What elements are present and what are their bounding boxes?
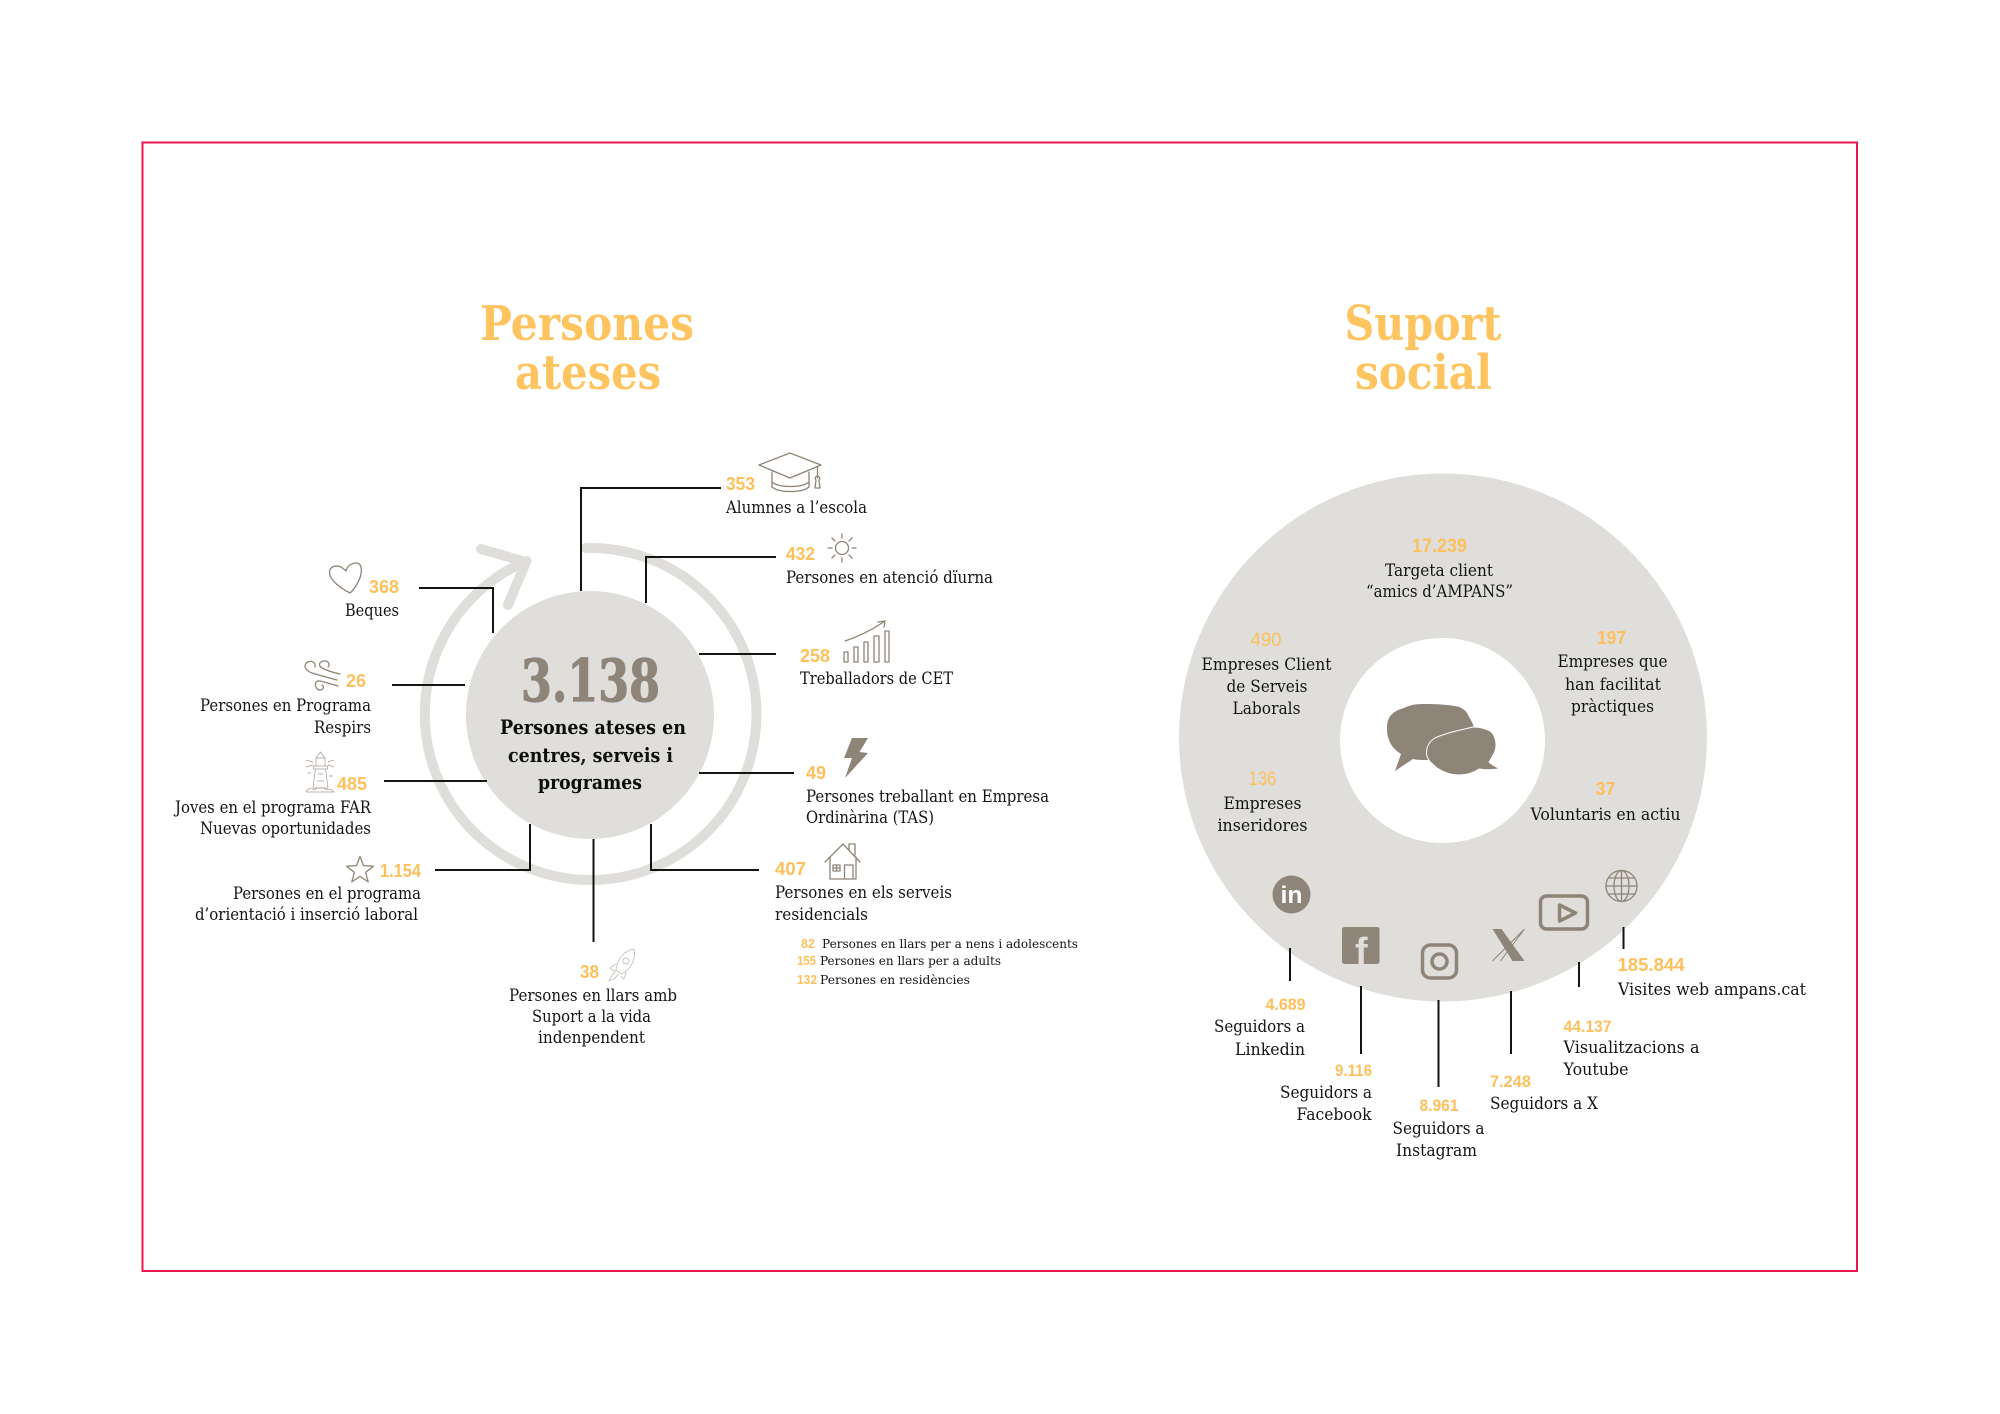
- item: 432 atencio diurna: Persones en atenció dïurna: [786, 568, 993, 587]
- heading: persones ateses: [480, 296, 694, 401]
- item: 485 programa far: [173, 752, 372, 838]
- item: 49 empresa ordinaria: Persones treballant en Empresa: [806, 787, 1049, 806]
- icon: youtube: [1540, 896, 1588, 929]
- circular arrow ring: [425, 548, 757, 880]
- item: 258 treballadors cet: 258: [800, 645, 830, 666]
- item: 1.154 orientacio i insercio: Persones en el programa: [233, 884, 421, 903]
- item: 353 alumnes: [725, 453, 867, 517]
- heading: suport social: Suport: [1344, 296, 1502, 352]
- icon: star: [347, 856, 373, 882]
- social: x: 7.248: [1490, 1072, 1531, 1091]
- icon: rising bar chart: [844, 621, 889, 662]
- breakdown list: 155: [797, 954, 816, 968]
- item: 368 beques: 368: [369, 576, 399, 597]
- item: 38 llars suport: Persones en llars amb: [509, 986, 677, 1005]
- stat: 136 empreses inseridores: 136: [1248, 769, 1276, 790]
- connector lines: [384, 488, 794, 942]
- panel: suport social: [1179, 296, 1806, 1160]
- item: 432 atencio diurna: [786, 534, 993, 587]
- total: 3.138: centres, serveis i: [508, 744, 673, 767]
- social: linkedin: 4.689: [1266, 995, 1306, 1014]
- central disc: [466, 591, 714, 839]
- stat: 37 voluntaris: 37: [1596, 778, 1616, 799]
- social: instagram: 8.961: [1420, 1096, 1458, 1115]
- social: facebook: Seguidors a: [1280, 1083, 1372, 1102]
- social: web: [1606, 870, 1806, 999]
- item: 38 llars suport: 38: [580, 961, 599, 982]
- stat: 136 empreses inseridores: Empreses: [1224, 794, 1302, 813]
- stat: 490 empreses client: [1202, 630, 1332, 718]
- social: youtube: 44.137: [1564, 1017, 1612, 1036]
- total: 3.138: [500, 647, 686, 794]
- icon: lighthouse: [306, 752, 334, 792]
- stat: 490 empreses client: Laborals: [1232, 699, 1300, 718]
- breakdown list: Persones en residències: [820, 972, 970, 987]
- stat: 17.239 targeta client: “amics d’AMPANS”: [1366, 582, 1513, 601]
- item: 38 llars suport: [509, 949, 677, 1047]
- item: 38 llars suport: Suport a la vida: [532, 1007, 651, 1026]
- item: 353 alumnes: 353: [726, 473, 755, 494]
- item: 368 beques: [329, 563, 399, 620]
- heading: persones ateses: Persones: [480, 296, 694, 352]
- item: 407 serveis residencials: Persones en els serveis: [775, 883, 952, 902]
- heading: suport social: [1344, 296, 1502, 401]
- stat: 490 empreses client: Empreses Client: [1202, 655, 1332, 674]
- item: 26 programa respirs: [200, 661, 371, 737]
- donut: [1179, 474, 1707, 1002]
- item: 432 atencio diurna: 432: [786, 543, 815, 564]
- item: 485 programa far: 485: [337, 773, 367, 794]
- item: 258 treballadors cet: Treballadors de CET: [800, 669, 953, 688]
- item: 368 beques: Beques: [345, 601, 399, 620]
- social: youtube: Youtube: [1563, 1060, 1628, 1079]
- breakdown list: 82: [801, 937, 815, 951]
- item: 26 programa respirs: Persones en Programa: [200, 696, 371, 715]
- heading: suport social: social: [1355, 345, 1492, 401]
- item: 407 serveis residencials: [775, 844, 1078, 987]
- icon: facebook: [1342, 927, 1380, 973]
- social: web: 185.844: [1618, 954, 1685, 975]
- breakdown list: 132: [797, 973, 817, 987]
- icon: linkedin: [1272, 876, 1310, 914]
- total: 3.138: 3.138: [521, 647, 660, 715]
- icon: wind: [305, 661, 340, 690]
- icon: instagram: [1422, 945, 1456, 978]
- stat: 197 practiques: [1558, 627, 1668, 716]
- social: instagram: [1392, 945, 1485, 1160]
- stat: 490 empreses client: 490: [1250, 630, 1282, 651]
- item: 485 programa far: Nuevas oportunidades: [200, 819, 371, 838]
- item: 49 empresa ordinaria: 49: [806, 762, 826, 783]
- icon: heart: [329, 563, 361, 593]
- icon: speech bubbles: [1387, 704, 1500, 775]
- icon: graduation cap: [759, 453, 821, 492]
- social: instagram: Seguidors a: [1392, 1119, 1485, 1138]
- stat: 197 practiques: han facilitat: [1565, 675, 1661, 694]
- breakdown list: Persones en llars per a adults: [820, 953, 1001, 968]
- social: instagram: Instagram: [1396, 1141, 1477, 1160]
- icon: house: [825, 844, 860, 879]
- total: 3.138: Persones ateses en: [500, 716, 686, 739]
- frame: [142, 142, 1857, 1271]
- social: facebook: Facebook: [1296, 1105, 1372, 1124]
- social: linkedin: Seguidors a: [1214, 1017, 1305, 1036]
- item: 26 programa respirs: Respirs: [314, 718, 371, 737]
- stat: 136 empreses inseridores: [1218, 769, 1308, 835]
- icon: rocket: [609, 949, 634, 981]
- stat: 197 practiques: 197: [1597, 627, 1626, 648]
- social: linkedin: [1214, 876, 1310, 1059]
- social: x: [1490, 929, 1598, 1113]
- breakdown list: Persones en llars per a nens i adolescents: [822, 936, 1078, 951]
- panel: persones ateses: [173, 296, 1078, 1047]
- item: 49 empresa ordinaria: Ordinàrina (TAS): [806, 808, 934, 827]
- social: youtube: Visualitzacions a: [1563, 1038, 1700, 1057]
- stat: 197 practiques: Empreses que: [1558, 652, 1668, 671]
- item: 485 programa far: Joves en el programa FAR: [173, 798, 372, 817]
- item: 407 serveis residencials: 407: [775, 858, 806, 879]
- social: x: Seguidors a X: [1490, 1094, 1598, 1113]
- stat: 136 empreses inseridores: inseridores: [1218, 816, 1308, 835]
- social: youtube: [1540, 896, 1700, 1079]
- stat: 17.239 targeta client: Targeta client: [1385, 561, 1493, 580]
- icon: sun: [828, 534, 856, 562]
- item: 1.154 orientacio i insercio: d’orientació i inserció laboral: [195, 905, 418, 924]
- item: 258 treballadors cet: [800, 621, 953, 688]
- stat: 37 voluntaris: [1530, 778, 1681, 824]
- stat: 197 practiques: pràctiques: [1571, 697, 1654, 716]
- icon: x: [1492, 929, 1524, 961]
- item: 26 programa respirs: 26: [346, 670, 366, 691]
- icon: globe: [1606, 870, 1637, 902]
- item: 1.154 orientacio i insercio: 1.154: [380, 860, 422, 881]
- social: linkedin: Linkedin: [1235, 1040, 1305, 1059]
- social: facebook: 9.116: [1335, 1061, 1372, 1080]
- icon: linkedin: in: [1280, 882, 1302, 909]
- item: 49 empresa ordinaria: [806, 738, 1049, 827]
- item: 407 serveis residencials: residencials: [775, 905, 868, 924]
- stat: 17.239 targeta client: [1366, 536, 1513, 601]
- stat: 37 voluntaris: Voluntaris en actiu: [1530, 805, 1681, 824]
- breakdown list: [797, 936, 1078, 987]
- total: 3.138: programes: [538, 771, 642, 794]
- social: facebook: [1280, 927, 1380, 1124]
- item: 1.154 orientacio i insercio: [195, 856, 422, 924]
- social: web: Visites web ampans.cat: [1617, 980, 1806, 999]
- icon: facebook: f: [1355, 931, 1368, 973]
- item: 38 llars suport: indenpendent: [538, 1028, 645, 1047]
- stat: 490 empreses client: de Serveis: [1226, 677, 1308, 696]
- item: 353 alumnes: Alumnes a l’escola: [725, 498, 867, 517]
- stat: 17.239 targeta client: 17.239: [1412, 536, 1467, 557]
- icon: lightning bolt: [844, 738, 868, 778]
- heading: persones ateses: ateses: [515, 345, 661, 401]
